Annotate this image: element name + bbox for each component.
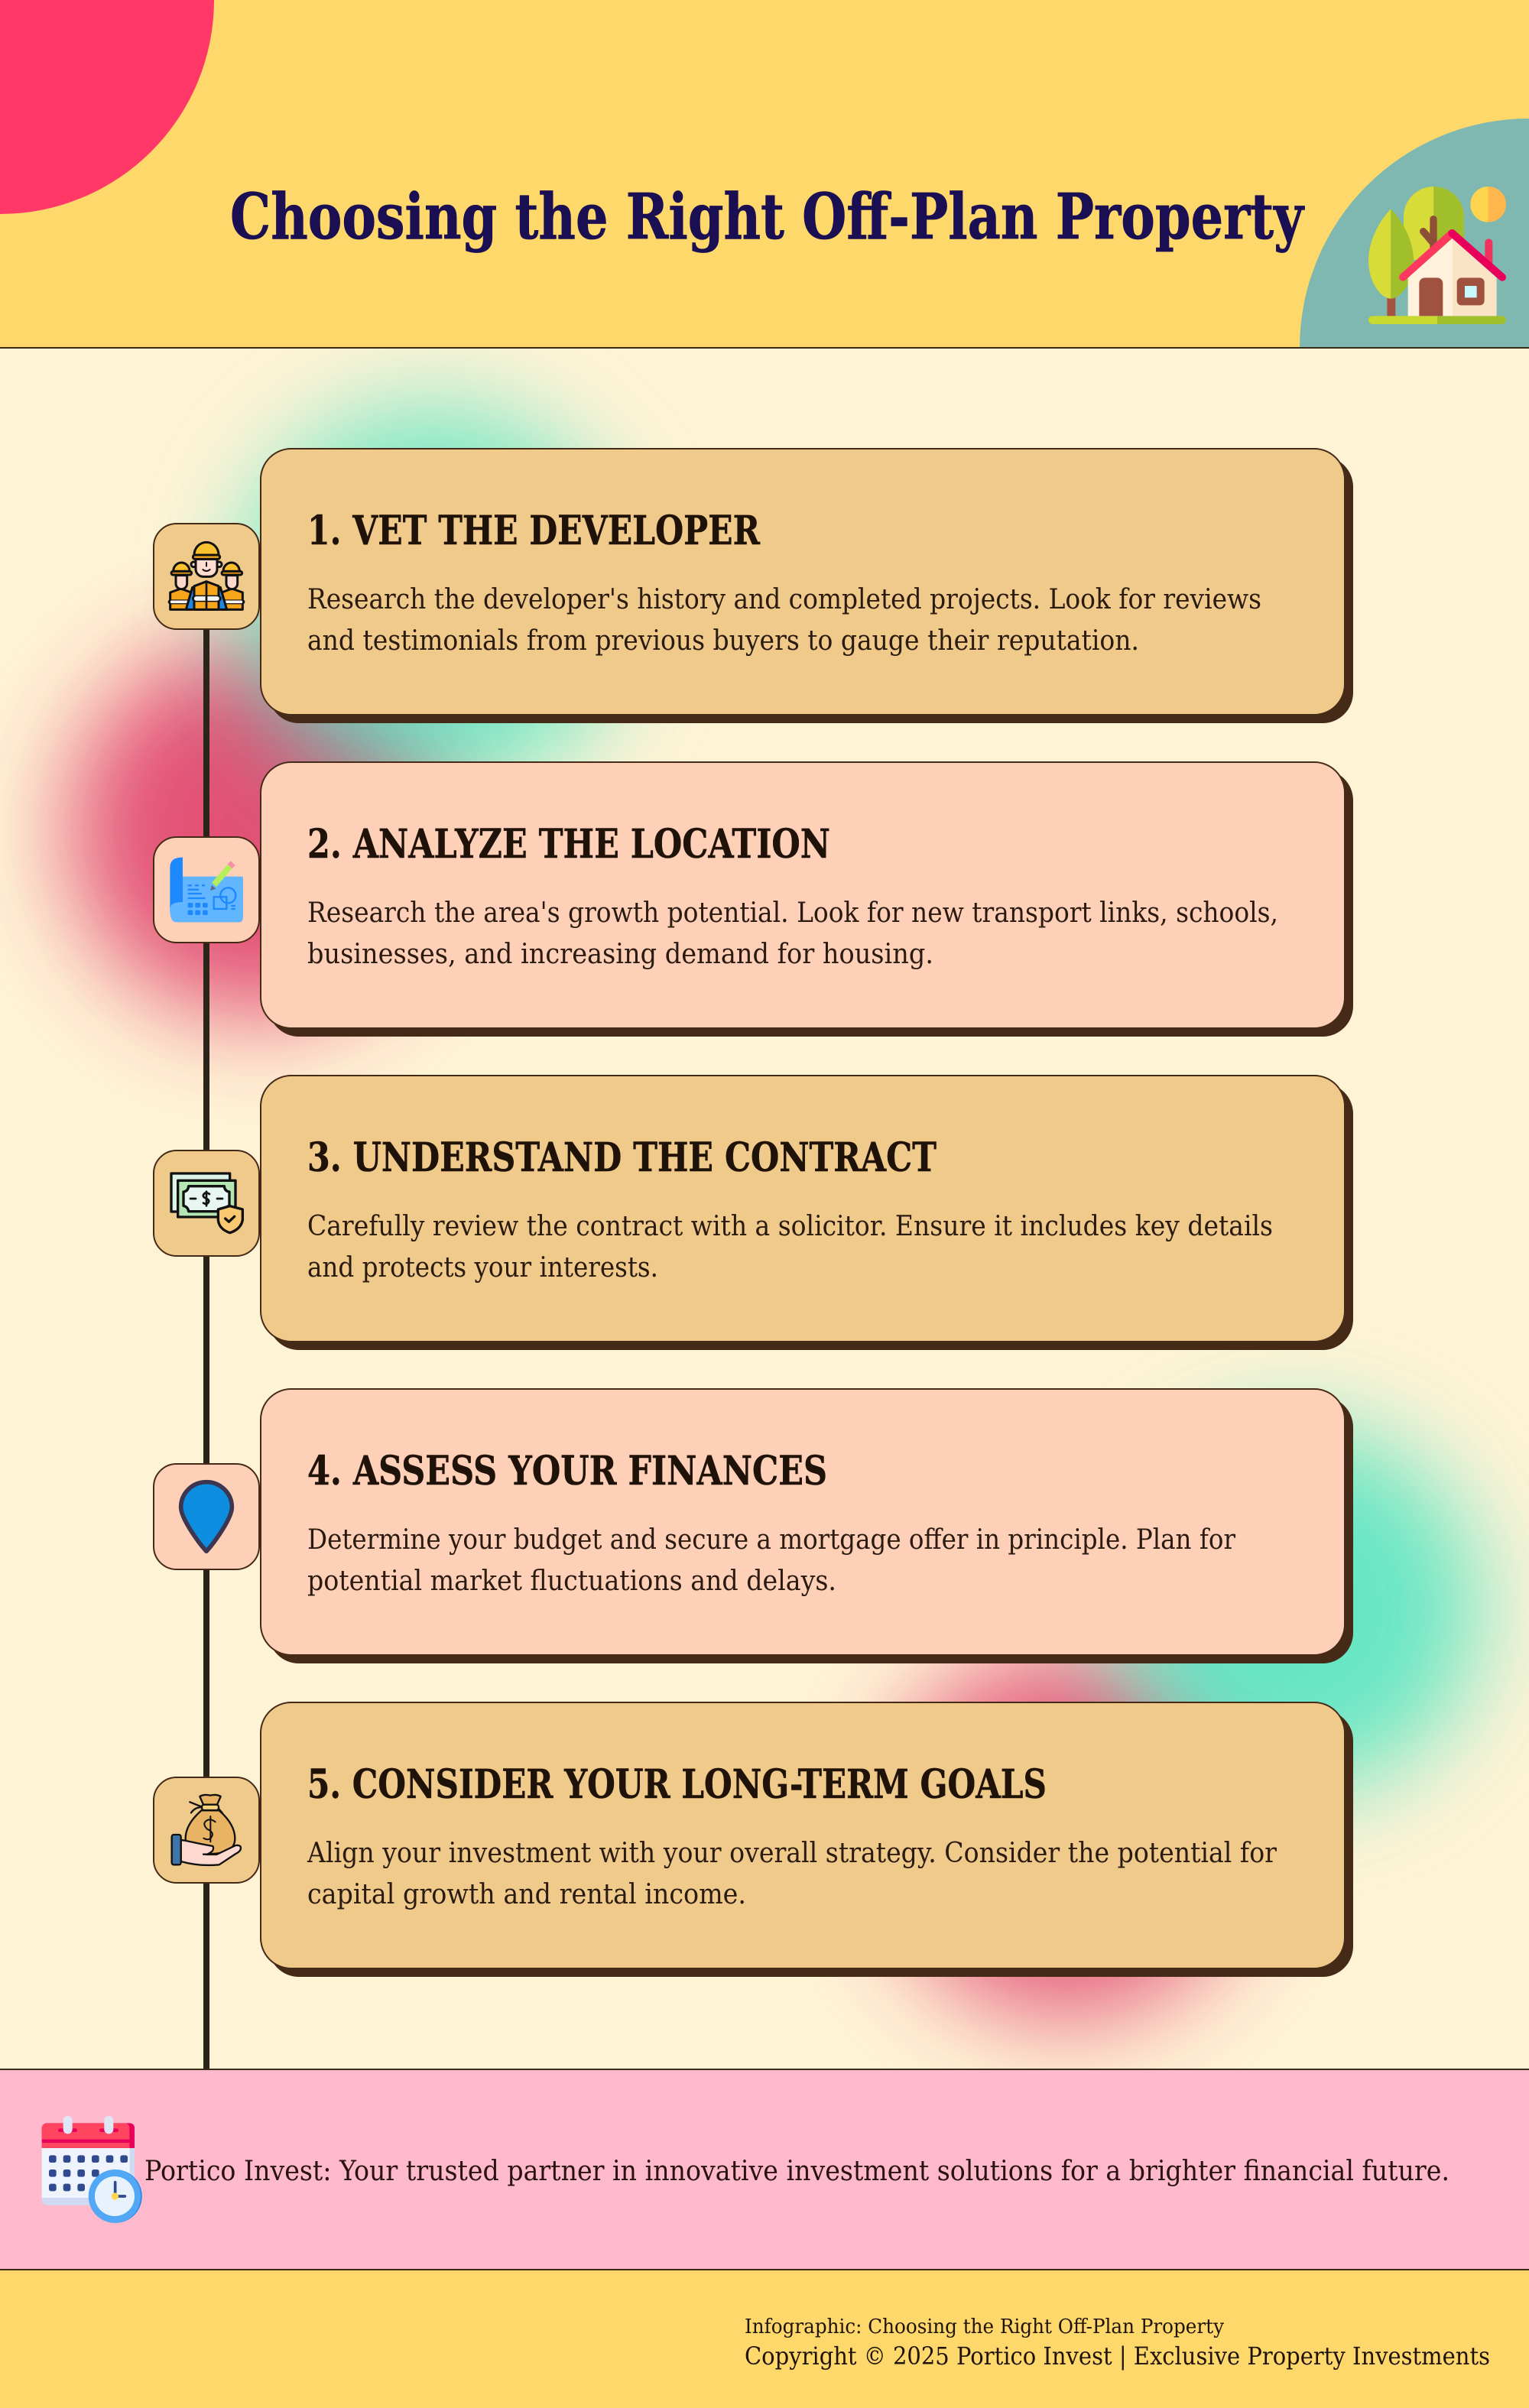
- card 3 panel: [261, 1076, 1353, 1350]
- card 4 body: Determine your budget and secure a mortgage offer in principle. Plan for: [307, 1524, 1236, 1556]
- card 5 body: Align your investment with your overall strategy. Consider the potential for: [307, 1838, 1277, 1869]
- card 1 body: Research the developer's history and completed projects. Look for reviews: [307, 584, 1261, 615]
- step 2 card: [154, 762, 1353, 1037]
- card 2 heading: 2. ANALYZE THE LOCATION: [307, 821, 830, 868]
- card 2 body: [307, 897, 1278, 970]
- card 2 body: Research the area's growth potential. Look for new transport links, schools,: [307, 897, 1278, 929]
- step 3 card: [154, 1076, 1353, 1350]
- decorative red circle: [0, 0, 214, 214]
- promo text: Portico Invest: Your trusted partner in innovative investment solutions for a brighter financial future.: [144, 2156, 1449, 2187]
- step 1 card: [154, 449, 1353, 723]
- title: Choosing the Right Off-Plan Property: [230, 180, 1305, 254]
- step 4 card: [154, 1389, 1353, 1663]
- icon tile 2: [154, 837, 259, 943]
- blurred colour blobs bottom right: [883, 1426, 1479, 2018]
- card 3 body: and protects your interests.: [307, 1252, 658, 1284]
- icon tile 3: [154, 1150, 259, 1256]
- card 1 heading: 1. VET THE DEVELOPER: [307, 508, 761, 554]
- icon: banknotes with shield: [171, 1173, 242, 1233]
- card 3 heading: 3. UNDERSTAND THE CONTRACT: [307, 1134, 937, 1181]
- card 5 body: capital growth and rental income.: [307, 1879, 746, 1910]
- card 5 body: [307, 1838, 1277, 1910]
- decorative teal circle: [1300, 118, 1529, 348]
- card 5 heading: 5. CONSIDER YOUR LONG-TERM GOALS: [307, 1761, 1047, 1808]
- icon tile 1: [154, 524, 259, 629]
- blurred colour blobs top left: [69, 405, 627, 1017]
- footer credit lines: Infographic: Choosing the Right Off-Plan Property: [745, 2316, 1224, 2338]
- main background: [0, 347, 1529, 2070]
- card 3 body: [307, 1211, 1273, 1284]
- icon: calendar with clock: [42, 2116, 142, 2223]
- icon: house with trees: [1368, 187, 1506, 324]
- step 5 card: [154, 1702, 1353, 1977]
- card 4 body: [307, 1524, 1236, 1597]
- promo band: [0, 2069, 1529, 2270]
- card 4 heading: 4. ASSESS YOUR FINANCES: [307, 1448, 827, 1494]
- card 2 panel: [261, 762, 1353, 1037]
- footer band: [0, 2270, 1529, 2408]
- card 1 body: and testimonials from previous buyers to gauge their reputation.: [307, 625, 1139, 657]
- icon: blueprint and pencil: [170, 858, 243, 922]
- icon tile 5: [154, 1777, 259, 1883]
- card 4 panel: [261, 1389, 1353, 1663]
- icon: money bag on hand: [172, 1795, 241, 1865]
- card 2 body: businesses, and increasing demand for housing.: [307, 939, 933, 970]
- icon: location pin: [181, 1482, 232, 1551]
- card 3 body: Carefully review the contract with a solicitor. Ensure it includes key details: [307, 1211, 1273, 1242]
- card 1 panel: [261, 449, 1353, 723]
- icon: construction workers: [170, 542, 242, 609]
- card 1 body: [307, 584, 1261, 657]
- card 5 panel: [261, 1702, 1353, 1977]
- card 4 body: potential market fluctuations and delays.: [307, 1566, 836, 1597]
- footer credit lines: [745, 2316, 1490, 2371]
- timeline line: [203, 576, 209, 2069]
- header band: [0, 0, 1529, 349]
- icon tile 4: [154, 1464, 259, 1569]
